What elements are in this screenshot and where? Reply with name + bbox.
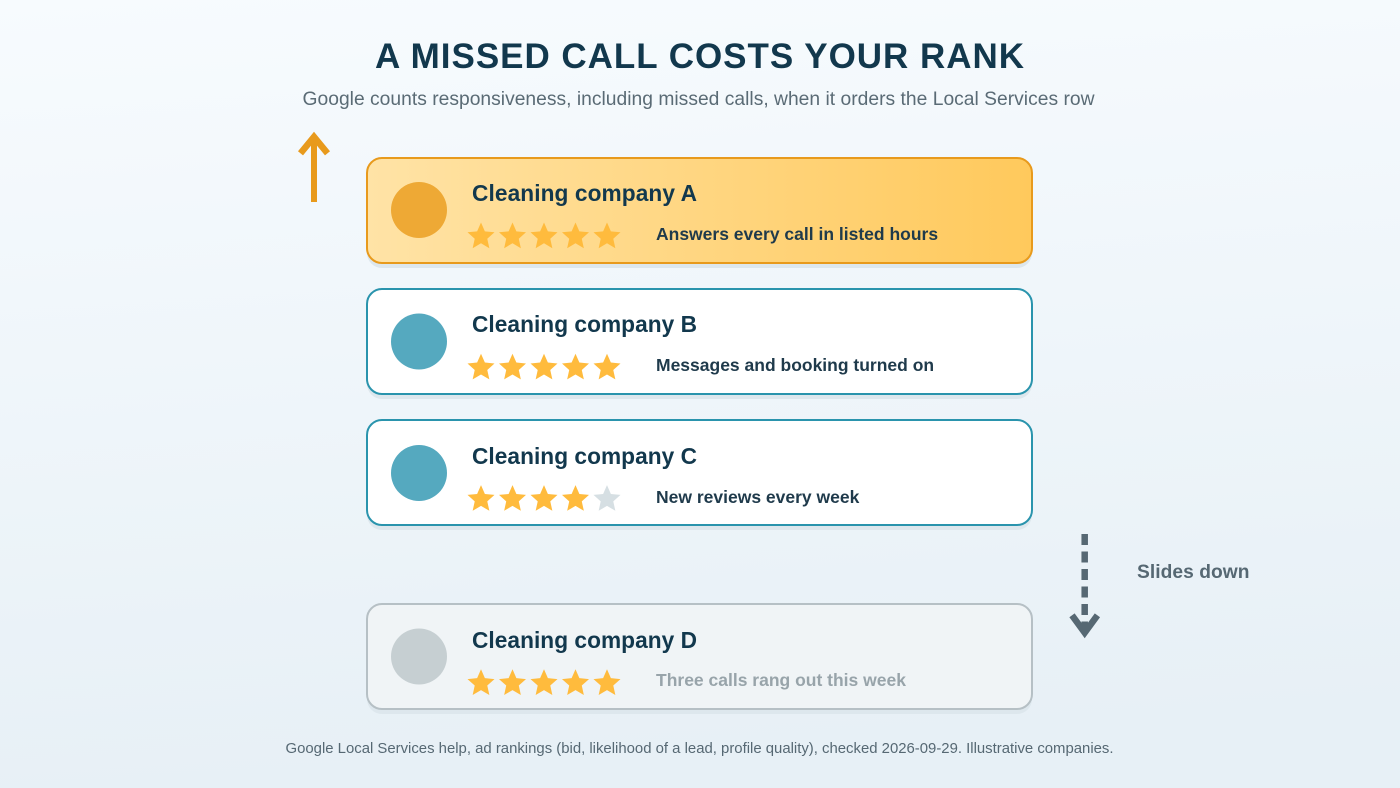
- name D: Cleaning company D: [472, 627, 697, 653]
- icon: avatar C: [391, 445, 447, 501]
- icon: avatar B: [391, 314, 447, 370]
- name C: Cleaning company C: [472, 443, 697, 469]
- panel: company A: [367, 158, 1032, 268]
- source footnote: Google Local Services help, ad rankings (bid, likelihood of a lead, profile quality), checked 2026-09-29. Illustrative companies.: [286, 741, 1114, 757]
- stars B: [468, 354, 620, 379]
- panel: company C: [367, 420, 1032, 530]
- stars A: [468, 222, 620, 248]
- panel: company B: [367, 289, 1032, 399]
- note C: New reviews every week: [656, 487, 860, 507]
- note D: Three calls rang out this week: [656, 670, 906, 690]
- subtitle: Google counts responsiveness, including missed calls, when it orders the Local Services row: [302, 89, 1095, 110]
- icon: avatar D: [391, 628, 447, 684]
- note B: Messages and booking turned on: [656, 355, 934, 375]
- name B: Cleaning company B: [472, 311, 697, 337]
- name A: Cleaning company A: [472, 180, 697, 206]
- stars D: [468, 669, 620, 695]
- arrow: slides down: [1072, 534, 1097, 633]
- stars C: [468, 485, 620, 511]
- title: A MISSED CALL COSTS YOUR RANK: [375, 37, 1024, 76]
- icon: avatar A: [391, 182, 447, 238]
- arrow: rises up: [300, 137, 328, 202]
- label: slides down: Slides down: [1137, 562, 1250, 583]
- note A: Answers every call in listed hours: [656, 224, 938, 244]
- panel: company D: [367, 604, 1032, 714]
